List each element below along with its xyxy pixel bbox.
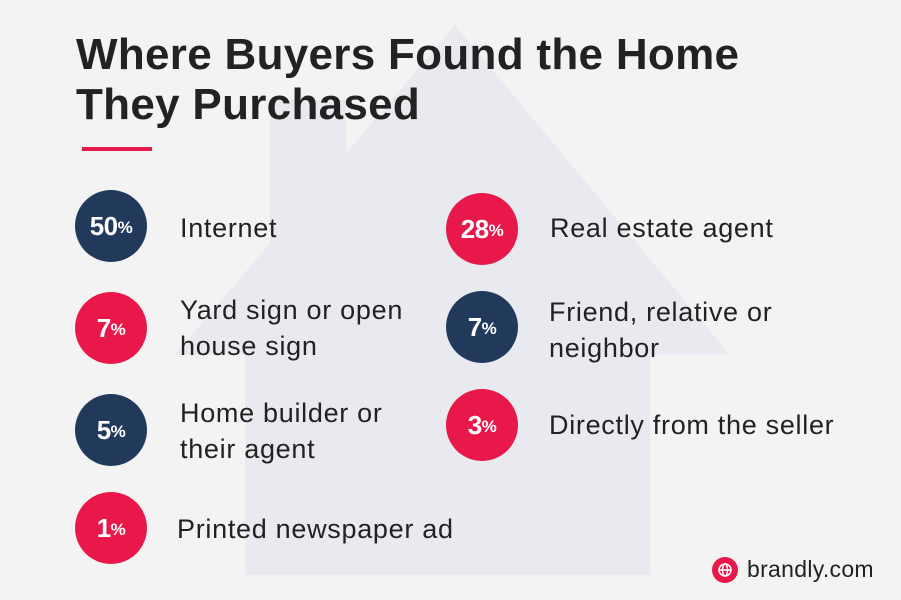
text: 5 bbox=[97, 414, 111, 444]
title: Where Buyers Found the Home bbox=[76, 30, 739, 79]
text: Yard sign or open bbox=[180, 295, 403, 325]
text: 28 bbox=[461, 214, 489, 244]
text: % bbox=[482, 319, 496, 338]
item: friend bbox=[446, 291, 772, 363]
logo: brandly.com bbox=[747, 556, 874, 582]
text: % bbox=[118, 218, 132, 237]
text: their agent bbox=[180, 434, 315, 464]
text: 50 bbox=[90, 210, 118, 240]
item: yard sign bbox=[75, 292, 403, 364]
text: 7 bbox=[97, 312, 111, 342]
text: Internet bbox=[180, 213, 277, 243]
text: Friend, relative or bbox=[549, 297, 772, 327]
text: Directly from the seller bbox=[549, 410, 834, 440]
text: % bbox=[482, 417, 496, 436]
text: Printed newspaper ad bbox=[177, 514, 454, 544]
item: newspaper bbox=[75, 492, 454, 564]
text: Real estate agent bbox=[550, 213, 774, 243]
item: home builder bbox=[75, 394, 383, 466]
title: They Purchased bbox=[76, 80, 420, 129]
title bbox=[76, 30, 739, 129]
text: % bbox=[111, 520, 125, 539]
text: % bbox=[111, 422, 125, 441]
text: % bbox=[111, 320, 125, 339]
text: 1 bbox=[97, 512, 111, 542]
item: internet bbox=[75, 190, 277, 262]
item: seller bbox=[446, 389, 834, 461]
text: Home builder or bbox=[180, 398, 383, 428]
text: 7 bbox=[468, 312, 482, 342]
item: real estate agent bbox=[446, 193, 774, 265]
title underline bbox=[82, 147, 152, 151]
text: 3 bbox=[468, 410, 482, 440]
text: neighbor bbox=[549, 333, 660, 363]
text: % bbox=[489, 221, 503, 240]
text: house sign bbox=[180, 331, 318, 361]
